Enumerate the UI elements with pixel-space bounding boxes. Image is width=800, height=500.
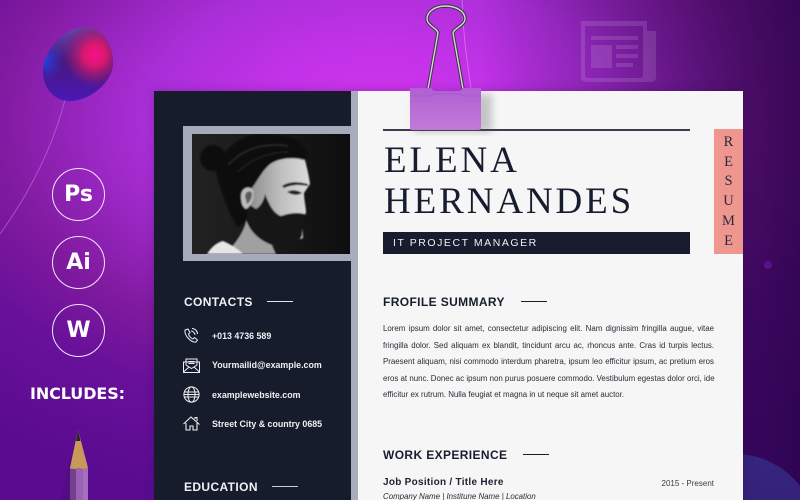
contact: website: examplewebsite.com [212,390,300,400]
resume tab: M [722,213,735,229]
profile rule [521,301,547,302]
profile paragraph [383,324,715,399]
resume tab: E [724,154,733,170]
resume tab [714,129,743,254]
includes label: INCLUDES: [30,384,125,403]
profile paragraph: eros at nunc. Donec ac ipsum non purus posuere commodo. Vestibulum egestas dolor orci, ide [383,374,715,383]
profile heading: FROFILE SUMMARY [383,295,505,309]
sidebar grey strip [351,91,358,500]
profile paragraph: fringilla dolor. Sed aliquam ex blandit, tincidunt arcu ac, rhoncus ante. Cras id turpis lectus. [383,341,714,350]
contact: phone: +013 4736 589 [212,331,271,341]
contact: email: Yourmailid@example.com [212,360,322,370]
contacts heading: CONTACTS [184,295,253,309]
icon: globe [183,386,200,403]
corner circle [653,454,800,500]
contacts rule [267,301,293,302]
icon: newspaper [581,21,656,82]
portrait photo [192,134,350,254]
portrait frame [183,126,351,261]
contact: address: Street City & country 0685 [212,419,322,429]
icon: mail [183,358,200,373]
badge: Ai: Ai [66,250,91,275]
job title bar [383,232,690,254]
resume paper [154,91,743,500]
software badges [52,168,105,357]
education rule [272,486,298,487]
badge: W [52,304,105,357]
clip shadow [414,94,492,132]
job title bar: IT PROJECT MANAGER [393,237,538,249]
resume tab: U [723,193,734,209]
work experience rule [523,454,549,455]
work experience heading: WORK EXPERIENCE [383,448,507,462]
name: ELENA [384,140,520,181]
resume tab: S [724,173,733,189]
icon: pencil [60,430,88,500]
binder clip [410,4,496,136]
badge: Ps: Ps [64,182,93,207]
profile paragraph: Praesent aliquam, nisi commodo interdum pharetra, ipsum leo efficitur ipsum, ac pretium eros [383,357,714,366]
badge: W: W [66,318,91,343]
balloon string [0,100,65,234]
icon: phone [184,328,198,343]
job title: Job Position / Title Here [383,477,504,488]
badge: Ps [52,168,105,221]
resume tab: R [724,134,733,150]
clip body [410,88,481,130]
profile paragraph: efficitur ex rutrum. Nulla feugiat et magna in ut neque sit amet auctor. [383,390,624,399]
balloon [43,27,113,101]
clip wire [427,6,465,89]
resume tab: E [724,233,733,249]
sidebar panel [154,91,351,500]
small dot [764,261,772,269]
job dates: 2015 - Present [662,479,714,488]
education heading: EDUCATION [184,480,258,494]
name: HERNANDES [384,180,634,222]
header top rule [383,129,690,131]
clip string [462,0,471,88]
profile paragraph: Lorem ipsum dolor sit amet, consectetur adipiscing elit. Nam dignissim fringilla augue, vitae [383,324,714,333]
name [384,140,634,222]
icon: house [183,416,200,430]
badge: Ai [52,236,105,289]
